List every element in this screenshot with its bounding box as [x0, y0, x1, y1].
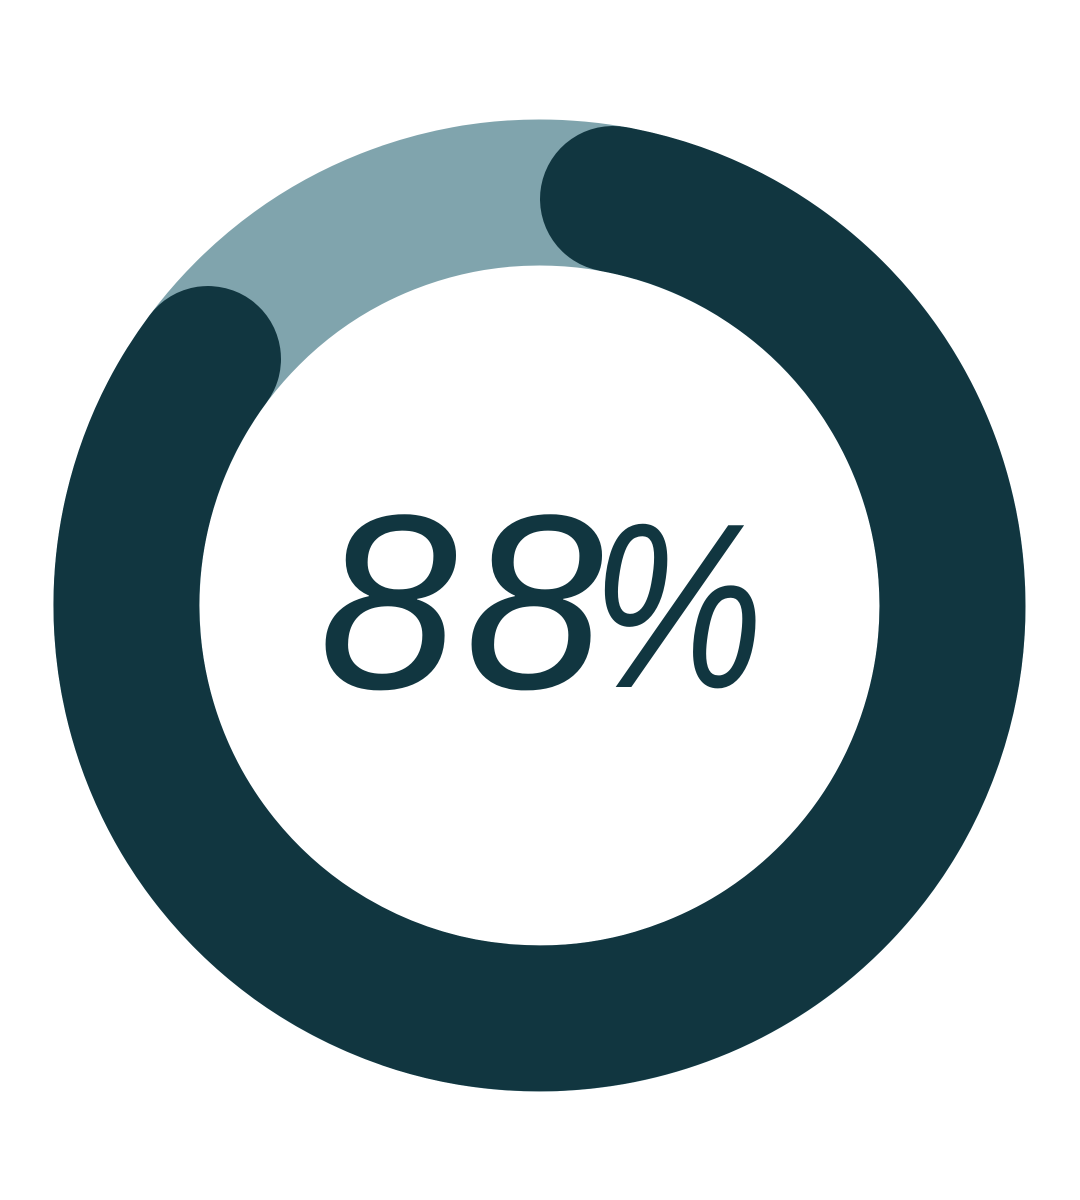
donut track	[126, 192, 952, 1018]
value label: 8	[319, 463, 457, 741]
value label: 8	[465, 463, 603, 741]
donut progress arc 88%	[126, 199, 952, 1018]
value label	[319, 463, 764, 741]
value label: %	[591, 474, 764, 737]
